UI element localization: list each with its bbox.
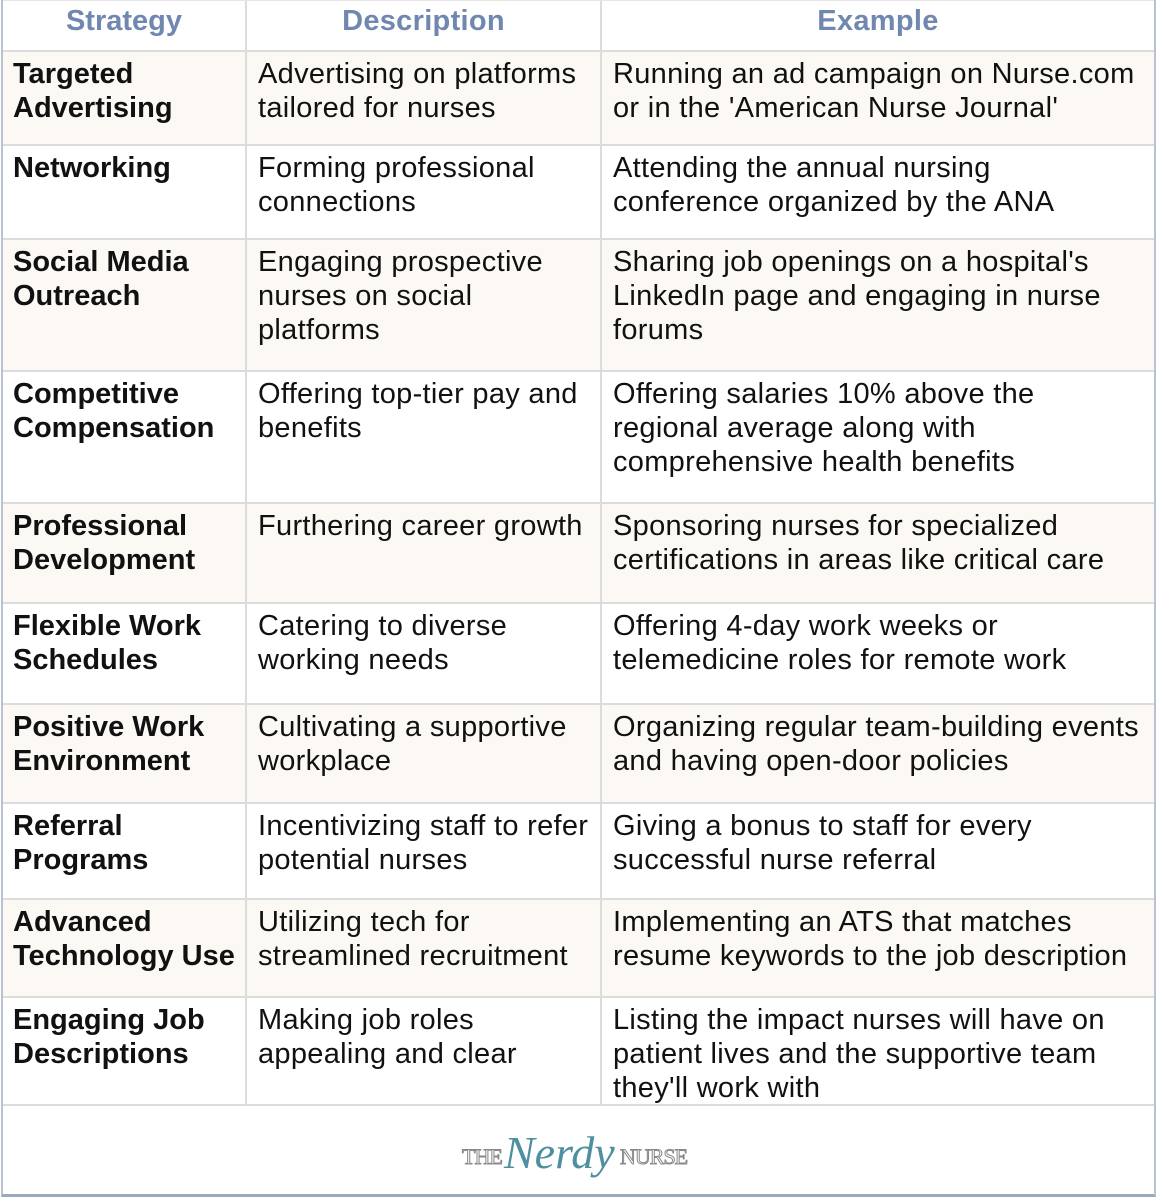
- row: Targeted Advertising: Advertising on platforms: [258, 58, 576, 90]
- row: Referral Programs: Programs: [13, 844, 148, 876]
- row: Social Media Outreach: Engaging prospective: [258, 246, 543, 278]
- row: Engaging Job Descriptions: Listing the impact nurses will have on: [613, 1004, 1105, 1036]
- row: Professional Development: Furthering career growth: [258, 510, 583, 542]
- row: Competitive Compensation: benefits: [258, 412, 362, 444]
- row: Competitive Compensation: Offering salaries 10% above the: [613, 378, 1034, 410]
- row: Professional Development: [3, 504, 1154, 604]
- row: Referral Programs: Incentivizing staff to refer: [258, 810, 588, 842]
- row: Referral Programs: Referral: [13, 810, 123, 842]
- row: Engaging Job Descriptions: [3, 998, 1154, 1106]
- row: Social Media Outreach: Social Media: [13, 246, 189, 278]
- row: Professional Development: Sponsoring nurses for specialized: [613, 510, 1058, 542]
- row: Advanced Technology Use: resume keywords to the job description: [613, 940, 1127, 972]
- row: Advanced Technology Use: [3, 900, 1154, 998]
- row: Professional Development: Development: [13, 544, 195, 576]
- row: Competitive Compensation: Offering top-tier pay and: [258, 378, 578, 410]
- row: Referral Programs: potential nurses: [258, 844, 468, 876]
- row: Targeted Advertising: Targeted: [13, 58, 133, 90]
- row: Engaging Job Descriptions: Engaging Job: [13, 1004, 205, 1036]
- row: Flexible Work Schedules: Offering 4-day work weeks or: [613, 610, 998, 642]
- row: Flexible Work Schedules: Catering to diverse: [258, 610, 507, 642]
- row: Social Media Outreach: LinkedIn page and engaging in nurse: [613, 280, 1101, 312]
- row: Advanced Technology Use: Advanced: [13, 906, 152, 938]
- row: Networking: connections: [258, 186, 416, 218]
- row: Targeted Advertising: Advertising: [13, 92, 173, 124]
- row: Targeted Advertising: Running an ad campaign on Nurse.com: [613, 58, 1135, 90]
- row: Engaging Job Descriptions: Descriptions: [13, 1038, 189, 1070]
- row: Positive Work Environment: Cultivating a supportive: [258, 711, 567, 743]
- row: Flexible Work Schedules: Flexible Work: [13, 610, 201, 642]
- logo: The Nerdy Nurse: THE: [462, 1144, 502, 1169]
- row: Competitive Compensation: regional average along with: [613, 412, 976, 444]
- row: Professional Development: Professional: [13, 510, 187, 542]
- row: Positive Work Environment: workplace: [258, 745, 391, 777]
- row: Networking: Networking: [13, 152, 171, 184]
- row: Flexible Work Schedules: Schedules: [13, 644, 158, 676]
- row: Targeted Advertising: tailored for nurses: [258, 92, 496, 124]
- row: Referral Programs: Giving a bonus to staff for every: [613, 810, 1032, 842]
- row: Professional Development: certifications in areas like critical care: [613, 544, 1104, 576]
- row: Networking: conference organized by the ANA: [613, 186, 1054, 218]
- row: Referral Programs: successful nurse referral: [613, 844, 936, 876]
- row: Competitive Compensation: comprehensive health benefits: [613, 446, 1015, 478]
- row: Competitive Compensation: Competitive: [13, 378, 179, 410]
- row: Engaging Job Descriptions: patient lives and the supportive team: [613, 1038, 1096, 1070]
- row: Flexible Work Schedules: telemedicine roles for remote work: [613, 644, 1066, 676]
- row: Competitive Compensation: Compensation: [13, 412, 214, 444]
- row: Engaging Job Descriptions: they'll work with: [613, 1072, 820, 1104]
- row: Engaging Job Descriptions: appealing and clear: [258, 1038, 517, 1070]
- logo: The Nerdy Nurse: NURSE: [620, 1144, 687, 1169]
- row: Advanced Technology Use: Technology Use: [13, 940, 235, 972]
- row: Advanced Technology Use: Utilizing tech for: [258, 906, 470, 938]
- row: Engaging Job Descriptions: Making job roles: [258, 1004, 474, 1036]
- row: Targeted Advertising: or in the 'American Nurse Journal': [613, 92, 1058, 124]
- row: Social Media Outreach: Outreach: [13, 280, 140, 312]
- row: Flexible Work Schedules: working needs: [258, 644, 449, 676]
- row: Social Media Outreach: forums: [613, 314, 703, 346]
- row: Positive Work Environment: and having open-door policies: [613, 745, 1009, 777]
- row: Positive Work Environment: Organizing regular team-building events: [613, 711, 1139, 743]
- row: Targeted Advertising: [3, 52, 1154, 146]
- header row: [3, 0, 1154, 52]
- row: Positive Work Environment: Positive Work: [13, 711, 204, 743]
- logo: The Nerdy Nurse: [462, 1127, 688, 1178]
- logo: The Nerdy Nurse: Nerdy: [504, 1127, 615, 1178]
- row: Advanced Technology Use: Implementing an ATS that matches: [613, 906, 1072, 938]
- row: Advanced Technology Use: streamlined recruitment: [258, 940, 568, 972]
- header row: Example: [817, 5, 939, 37]
- row: Networking: Forming professional: [258, 152, 535, 184]
- row: Networking: [3, 146, 1154, 240]
- row: Social Media Outreach: Sharing job openings on a hospital's: [613, 246, 1089, 278]
- row: Social Media Outreach: [3, 240, 1154, 372]
- header row: Strategy: [66, 5, 182, 37]
- row: Referral Programs: [3, 804, 1154, 900]
- row: Flexible Work Schedules: [3, 604, 1154, 705]
- row: Networking: Attending the annual nursing: [613, 152, 991, 184]
- row: Social Media Outreach: nurses on social: [258, 280, 472, 312]
- row: Social Media Outreach: platforms: [258, 314, 380, 346]
- row: Competitive Compensation: [3, 372, 1154, 504]
- row: Positive Work Environment: [3, 705, 1154, 804]
- row: Positive Work Environment: Environment: [13, 745, 190, 777]
- header row: Description: [342, 5, 505, 37]
